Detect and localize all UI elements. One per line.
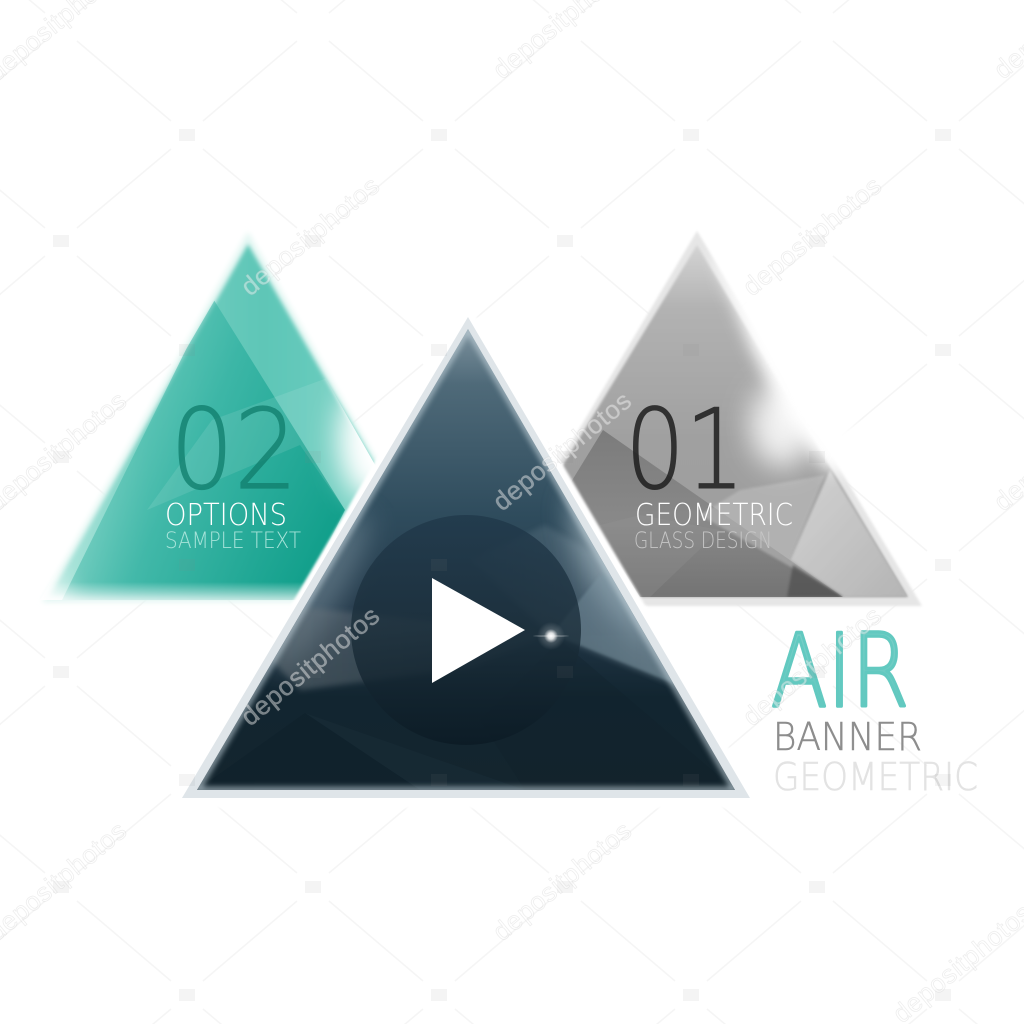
heading: air: AIR [771,612,909,730]
watermarks: depositphotos [235,600,385,732]
label: geometric subtitle: GEOMETRIC [773,755,978,799]
watermarks: depositphotos [487,385,637,517]
edge glow [197,329,735,790]
label: geometric: GEOMETRIC [635,498,793,533]
watermarks: depositphotos [737,170,887,302]
label: sample text: SAMPLE TEXT [165,529,301,554]
watermarks: depositphotos [737,600,887,732]
glass band under flare [528,526,675,687]
icon: play circle [351,515,581,745]
icon: play arrow [432,578,525,683]
number 01: 01 [625,386,745,515]
watermark camera icons [53,129,951,1001]
icon: lens flare [533,622,569,650]
panel: dark triangle with play button [172,303,764,808]
number 02: 02 [170,386,298,515]
inner darker triangle [62,297,345,600]
diagonal dark band [560,430,843,597]
left side highlight [272,512,378,675]
upper right edge fade [716,240,870,470]
watermarks: depositphotos [487,815,637,947]
label: banner: BANNER [773,715,922,759]
panel: teal triangle 02 [43,234,376,604]
left band [273,609,364,692]
label: options: OPTIONS [165,498,287,533]
panel: gray triangle 01 [555,231,922,606]
right side highlight [554,496,644,641]
label: glass design: GLASS DESIGN [634,529,772,554]
watermarks: depositphotos [235,170,385,302]
